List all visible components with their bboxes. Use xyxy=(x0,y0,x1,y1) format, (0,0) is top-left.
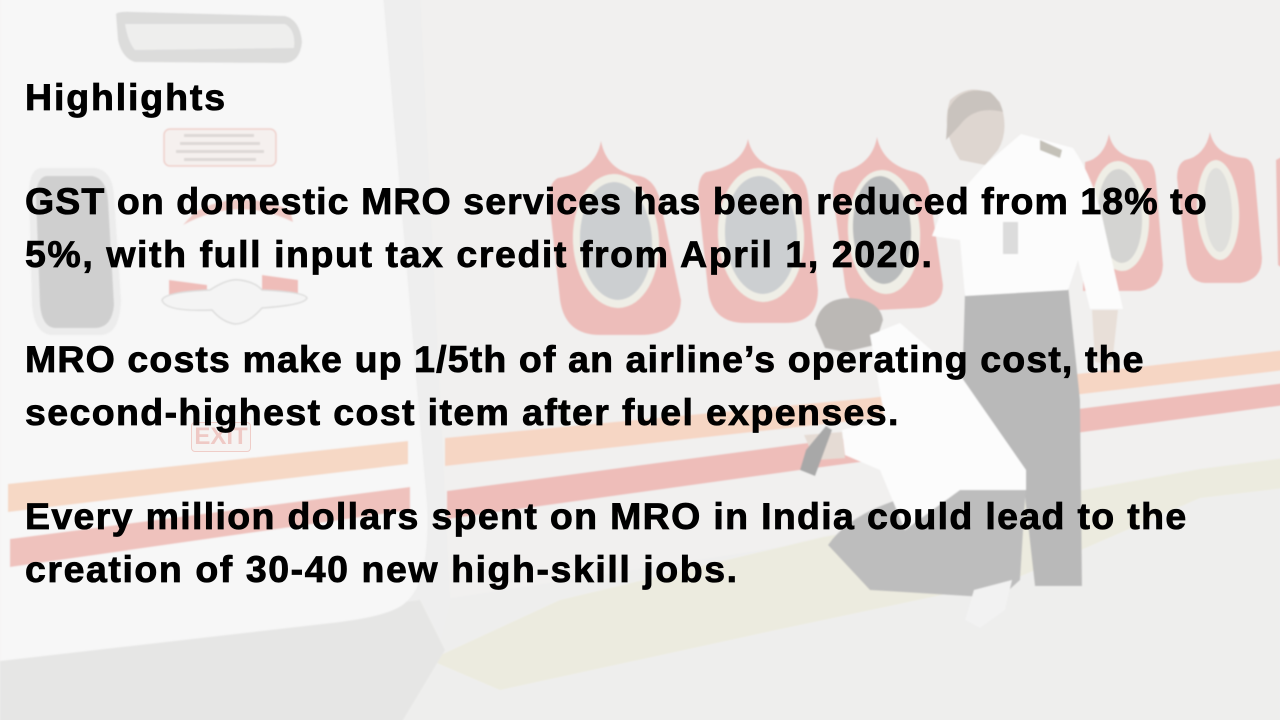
text block: GST reduction: GST on domestic MRO services has been reduced from 18% to xyxy=(25,180,1208,222)
heading: Highlights: Highlights xyxy=(25,76,227,118)
text block: job creation: creation of 30-40 new high-skill jobs. xyxy=(25,548,739,590)
text block: MRO cost share: MRO costs make up 1/5th of an airline’s operating cost, the xyxy=(25,338,1145,380)
stripes xyxy=(8,441,408,512)
text block: MRO cost share xyxy=(25,338,1145,433)
door handle xyxy=(169,275,298,298)
kneeling engineer xyxy=(828,483,1026,598)
text block: GST reduction xyxy=(25,180,1208,275)
door gap xyxy=(383,0,450,640)
lower fuselage and ground xyxy=(0,470,1280,720)
EXIT sign: EXIT xyxy=(194,423,248,450)
text block: MRO cost share: second-highest cost item after fuel expenses. xyxy=(25,391,900,433)
red arrow arc xyxy=(183,199,293,225)
door window xyxy=(29,168,121,335)
door vent xyxy=(116,12,302,63)
text block: job creation xyxy=(25,495,1188,590)
text block: job creation: Every million dollars spent on MRO in India could lead to the xyxy=(25,495,1188,537)
windows xyxy=(549,132,1280,335)
text block: GST reduction: 5%, with full input tax credit from April 1, 2020. xyxy=(25,233,934,275)
standing engineer xyxy=(960,285,1082,586)
placard xyxy=(164,129,276,166)
door panel xyxy=(0,0,427,661)
